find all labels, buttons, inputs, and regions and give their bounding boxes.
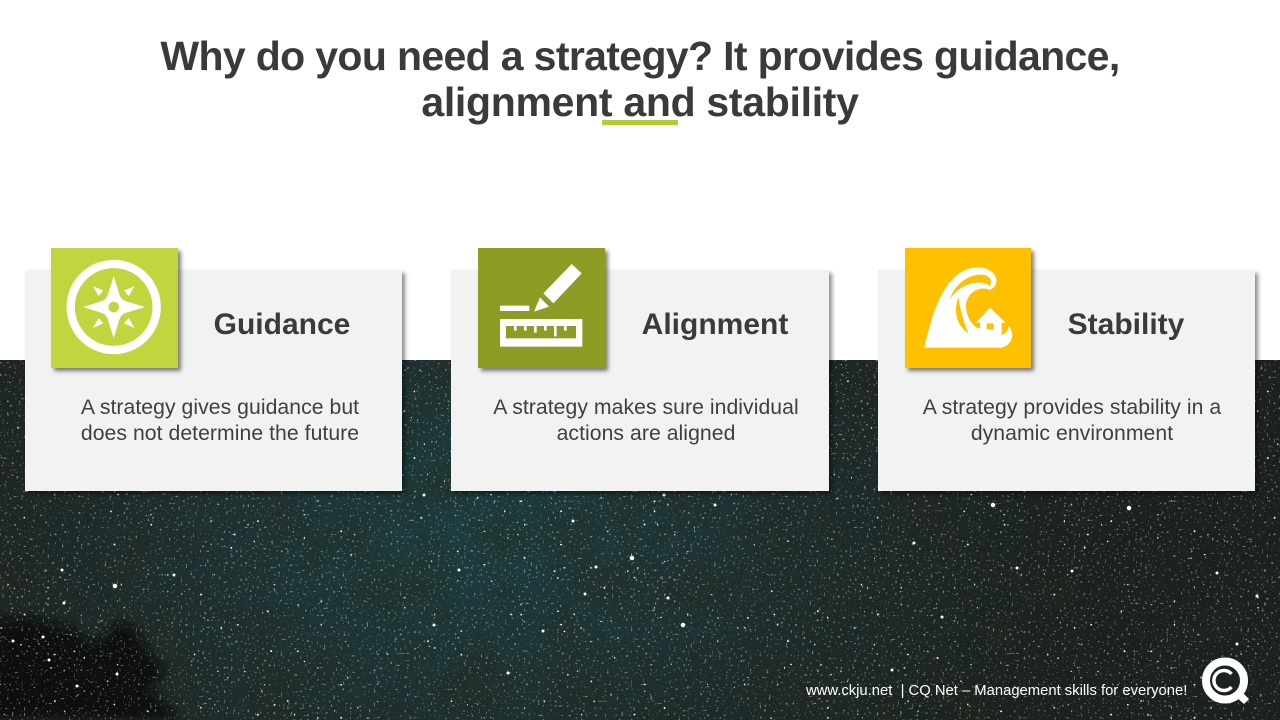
icon: compass	[51, 248, 178, 368]
text: guidance description	[81, 396, 359, 445]
text: alignment description: A strategy makes sure individual	[493, 396, 799, 419]
icon: pencil and ruler	[478, 248, 605, 368]
text: alignment description	[493, 396, 799, 445]
logo: CQ	[1202, 658, 1249, 704]
panel: guidance	[25, 270, 402, 491]
title: Why do you need a strategy? It provides guidance,	[160, 33, 1120, 79]
text: stability description: dynamic environment	[971, 422, 1173, 445]
footer text: www.ckju.net | CQ Net – Management skills for everyone!	[806, 683, 1187, 699]
text: alignment description: actions are aligned	[557, 422, 735, 445]
panel: stability	[878, 270, 1255, 491]
heading: alignment: Alignment	[642, 308, 788, 341]
background: night sky with stars	[0, 360, 1280, 720]
heading: stability: Stability	[1068, 308, 1184, 341]
title: alignment and stability	[421, 79, 859, 125]
text: stability description	[922, 396, 1222, 445]
text: stability description: A strategy provides stability in a	[923, 396, 1221, 419]
text: guidance description: A strategy gives guidance but	[81, 396, 359, 419]
title	[160, 33, 1120, 125]
title underline accent	[602, 120, 678, 125]
icon: wave and house	[905, 248, 1031, 368]
panel: alignment	[451, 270, 829, 491]
text: guidance description: does not determine the future	[81, 422, 359, 445]
heading: guidance: Guidance	[214, 308, 350, 341]
